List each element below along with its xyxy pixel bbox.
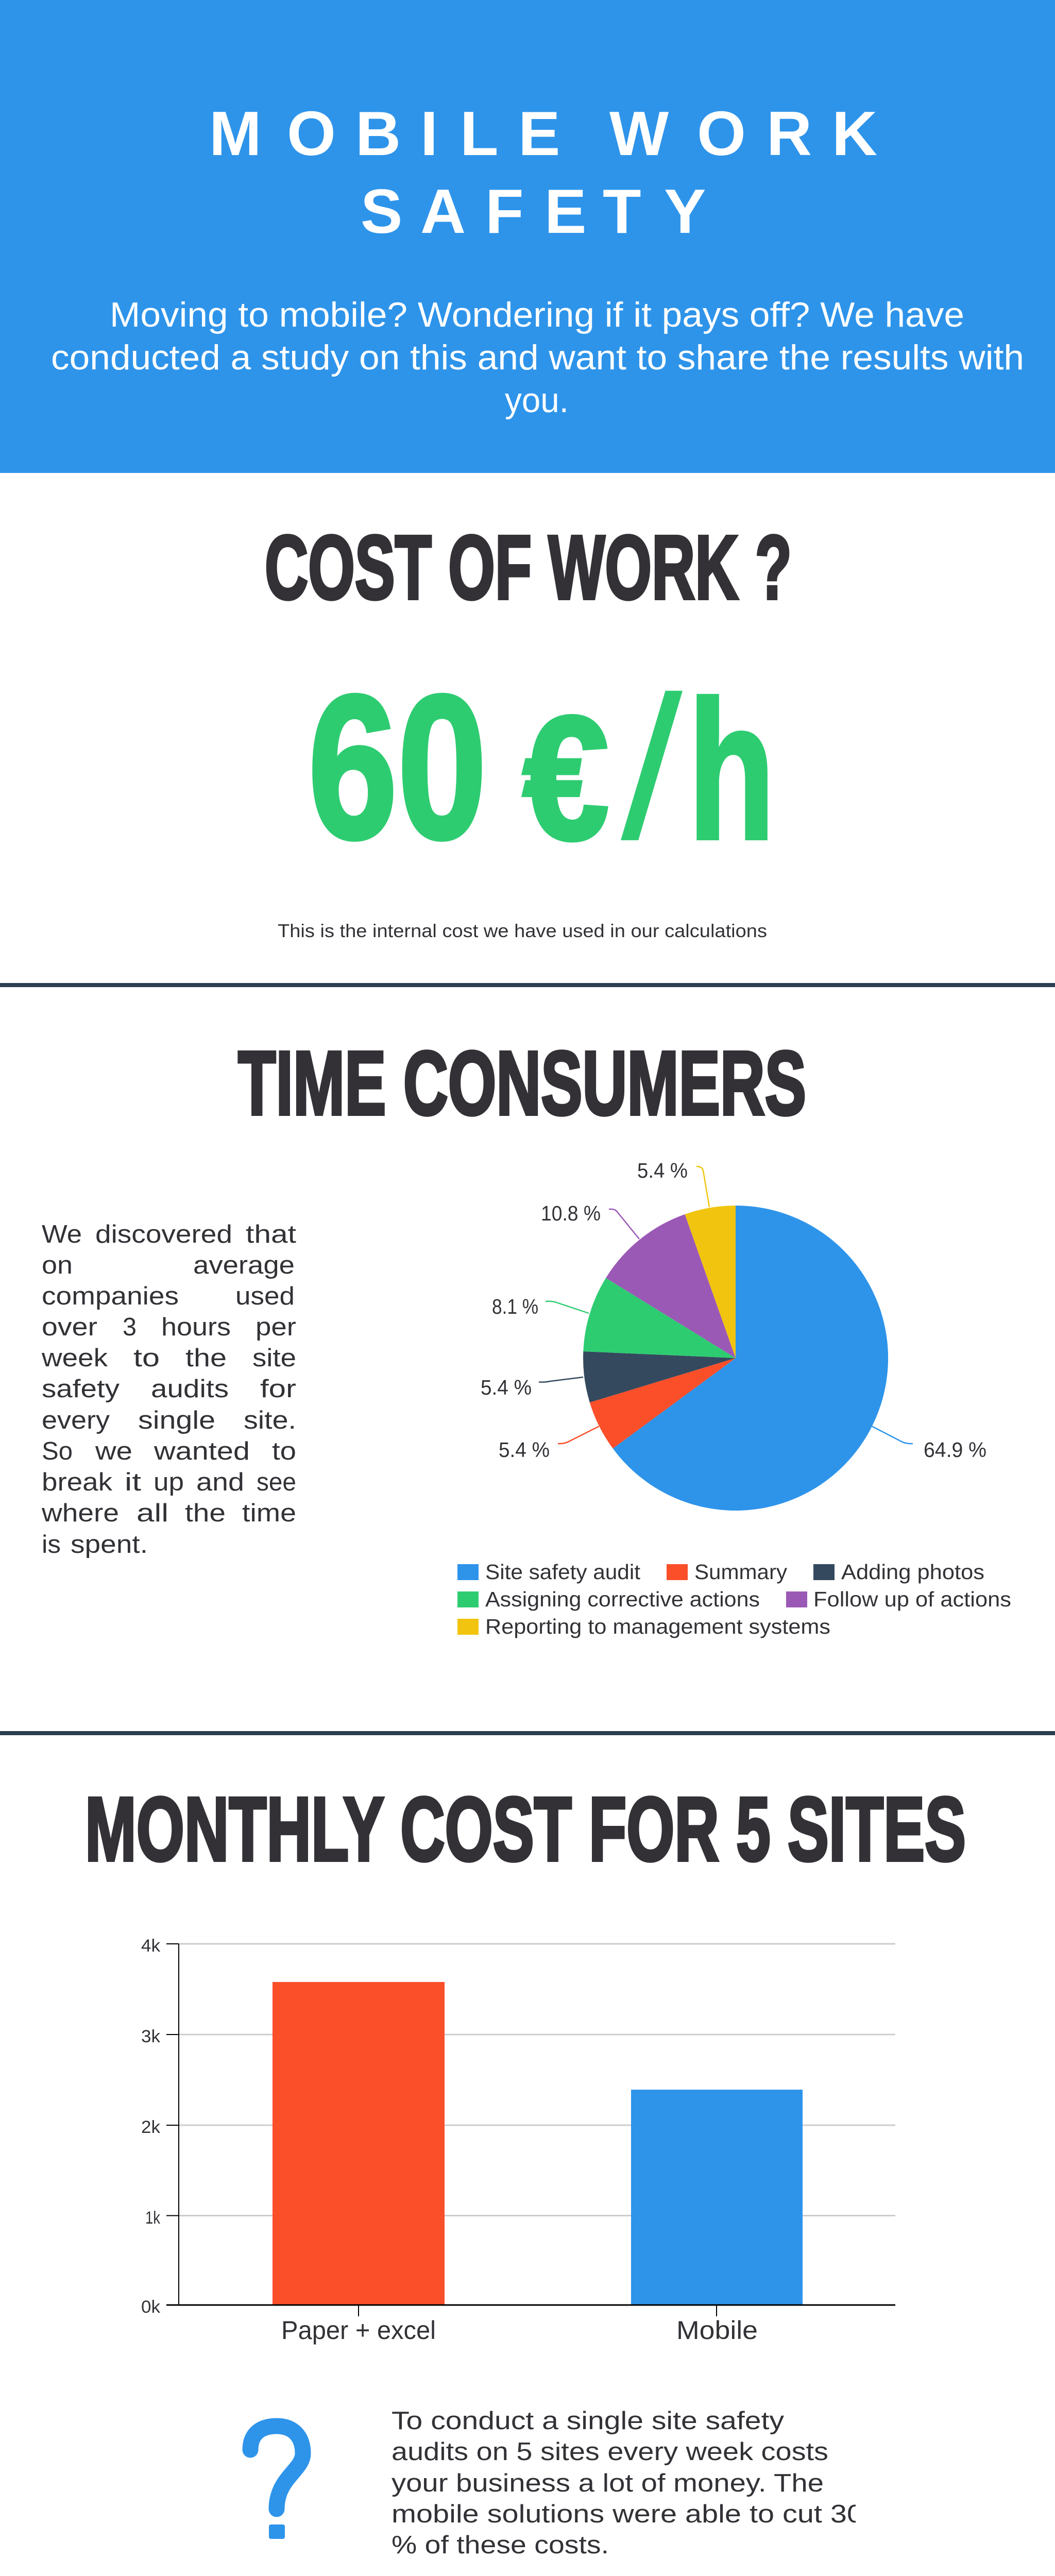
paragraph: time consumers: it (125, 1468, 142, 1496)
paragraph: time consumers: to (133, 1344, 160, 1372)
bar chart: 4k (141, 1936, 161, 1956)
intro text (51, 295, 1024, 420)
paragraph: time consumers: is (42, 1531, 61, 1558)
paragraph: time consumers: safety (42, 1375, 120, 1403)
bar chart: 2k (141, 2117, 161, 2137)
paragraph: time consumers: average (193, 1251, 295, 1279)
caption: This is the internal cost we have used in our calculations (278, 920, 767, 941)
paragraph: monthly cost: % of these costs. (392, 2531, 609, 2559)
panel: monthly cost (85, 1779, 966, 2559)
intro text: Moving to mobile? Wondering if it pays off? We have (110, 295, 964, 334)
paragraph: time consumers: per (256, 1313, 296, 1341)
paragraph: time consumers: We (42, 1221, 82, 1248)
heading: time consumers: TIME CONSUMERS (238, 1033, 806, 1134)
bar chart: 0k (141, 2297, 161, 2317)
paragraph: time consumers: for (260, 1375, 296, 1403)
pie chart: 5.4 % (637, 1159, 688, 1182)
paragraph: time consumers: time (242, 1499, 296, 1527)
pie legend: Site safety audit (485, 1560, 641, 1584)
paragraph: time consumers (41, 1221, 296, 1558)
title (209, 98, 877, 246)
title: SAFETY (361, 176, 706, 246)
panel: header (0, 0, 1055, 473)
bar chart: 1k (145, 2208, 161, 2228)
paragraph: time consumers: used (235, 1282, 295, 1310)
paragraph: time consumers: single (138, 1406, 215, 1434)
paragraph: time consumers: discovered (95, 1221, 232, 1248)
big number: 60 euro per hour (308, 653, 775, 882)
paragraph: time consumers: site (252, 1344, 296, 1372)
paragraph: time consumers: 3 (123, 1313, 137, 1341)
paragraph: time consumers: we (95, 1437, 132, 1465)
pie chart: 5.4 % (481, 1376, 532, 1399)
paragraph: time consumers: all (137, 1499, 168, 1527)
big number: 60 euro per hour: € (523, 680, 609, 876)
paragraph: time consumers: hours (161, 1313, 231, 1341)
paragraph: time consumers: audits (151, 1375, 229, 1403)
paragraph: time consumers: break (42, 1468, 113, 1496)
paragraph: time consumers: week (41, 1344, 108, 1372)
bar chart (141, 1936, 895, 2345)
heading: cost of work: COST OF WORK ? (265, 517, 792, 618)
paragraph: monthly cost: mobile solutions were able to cut 30 (392, 2500, 863, 2528)
big number: 60 euro per hour: / (621, 654, 683, 882)
pie legend: Assigning corrective actions (485, 1587, 760, 1611)
paragraph: time consumers: So (42, 1437, 73, 1465)
pie chart: 64.9 % (924, 1438, 986, 1462)
paragraph: time consumers: every (42, 1406, 110, 1434)
pie chart: 8.1 % (492, 1295, 538, 1318)
paragraph: time consumers: the (185, 1344, 227, 1372)
bar chart: 3k (141, 2027, 161, 2046)
pie legend (457, 1560, 1011, 1638)
paragraph: time consumers: see (257, 1468, 296, 1496)
paragraph: time consumers: up (154, 1468, 184, 1496)
paragraph: time consumers: to (272, 1437, 296, 1465)
paragraph: time consumers: where (41, 1499, 119, 1527)
bar chart: Mobile (676, 2316, 758, 2345)
big number: 60 euro per hour: h (688, 660, 775, 880)
paragraph: monthly cost: your business a lot of money. The (392, 2469, 824, 2497)
pie legend: Follow up of actions (813, 1587, 1011, 1611)
intro text: you. (505, 381, 569, 420)
paragraph: time consumers: spent. (71, 1531, 148, 1558)
paragraph: time consumers: on (42, 1251, 73, 1279)
paragraph: time consumers: the (185, 1499, 226, 1527)
paragraph: time consumers: over (42, 1313, 97, 1341)
pie legend: Adding photos (841, 1560, 984, 1584)
paragraph: time consumers: that (246, 1221, 296, 1248)
panel: cost of work (265, 517, 792, 941)
pie chart (481, 1159, 986, 1511)
big number: 60 euro per hour: 60 (308, 653, 487, 882)
paragraph: monthly cost (392, 2407, 863, 2559)
paragraph: time consumers: wanted (154, 1437, 250, 1465)
paragraph: monthly cost: audits on 5 sites every week costs (392, 2438, 828, 2466)
intro text: conducted a study on this and want to share the results with (51, 338, 1024, 377)
paragraph: monthly cost: To conduct a single site safety (392, 2407, 785, 2435)
icon: question mark (250, 2426, 303, 2539)
pie legend: Reporting to management systems (485, 1615, 830, 1638)
paragraph: time consumers: site. (244, 1406, 296, 1434)
pie legend: Summary (694, 1560, 788, 1584)
paragraph: time consumers: companies (42, 1282, 179, 1310)
title: MOBILE WORK (209, 98, 877, 168)
pie chart: 10.8 % (541, 1201, 601, 1225)
panel: time consumers (41, 1033, 1011, 1638)
pie chart: 5.4 % (499, 1438, 550, 1462)
paragraph: time consumers: and (196, 1468, 244, 1496)
bar chart: Paper + excel (281, 2316, 436, 2345)
